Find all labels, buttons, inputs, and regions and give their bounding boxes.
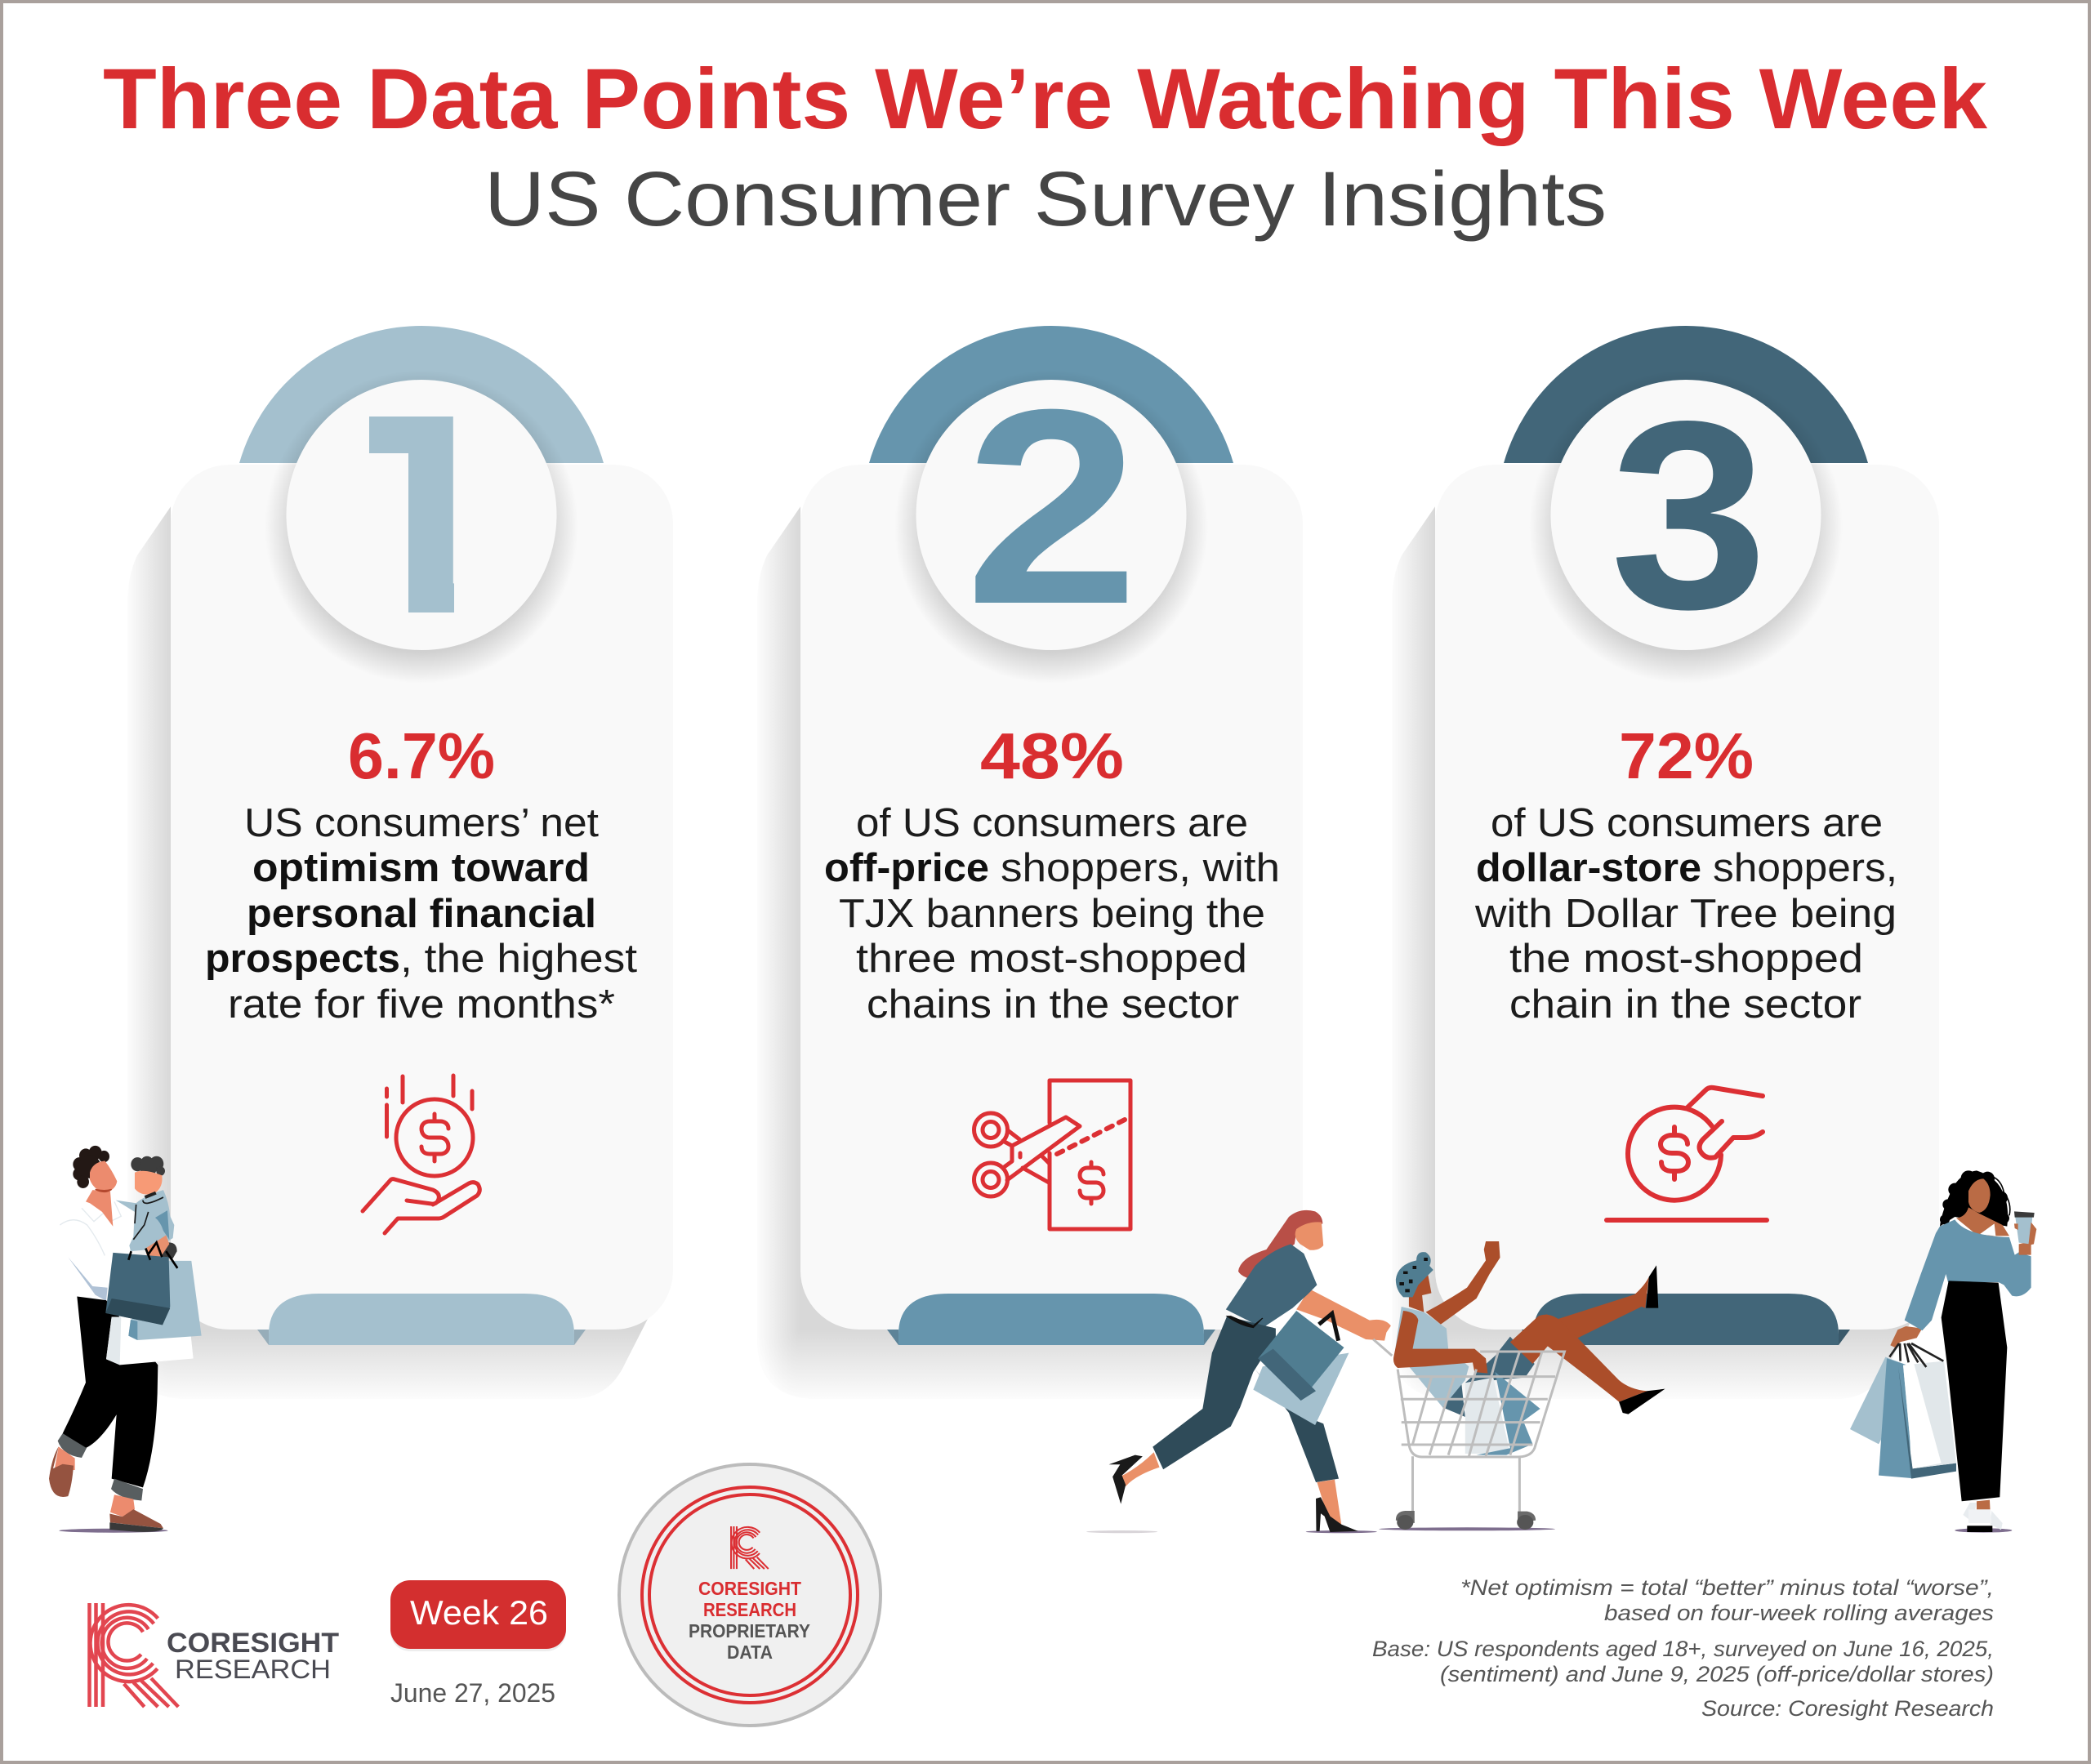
description 2 [824, 801, 1280, 1027]
footnotes [1372, 1575, 1994, 1721]
description 1: personal financial [247, 892, 596, 936]
arch 3 [1504, 326, 1868, 463]
seal text: CORESIGHT [698, 1578, 801, 1599]
panel: data point 2 [757, 326, 1303, 1401]
description 3: of US consumers are [1491, 801, 1883, 845]
card 3 [1435, 465, 1939, 1330]
bottom tab 1 [257, 1294, 586, 1345]
logo mark [90, 1603, 178, 1707]
logo wordmark [167, 1628, 339, 1684]
card shadow 2 [757, 490, 1282, 1401]
week badge: Week 26 [410, 1593, 548, 1632]
description 2: of US consumers are [856, 801, 1248, 845]
seal text: PROPRIETARY [689, 1620, 810, 1642]
description 2: shoppers, with [1001, 846, 1280, 890]
number badge 1 [271, 378, 572, 677]
icon: hand placing coin [1607, 1088, 1767, 1220]
logo: Coresight Research [90, 1603, 339, 1707]
subtitle: US Consumer Survey Insights [484, 156, 1607, 243]
seal: proprietary data [619, 1464, 881, 1726]
description 1: rate for five months* [228, 982, 615, 1027]
description 1: optimism toward [252, 846, 590, 890]
card shadow 3 [1392, 490, 1917, 1401]
footnotes: *Net optimism = total “better” minus total “worse”, [1460, 1575, 1994, 1600]
illustration: woman pushing shopping cart with seated woman [1086, 1210, 1665, 1533]
seal text: RESEARCH [703, 1599, 796, 1620]
description 3: shoppers, [1713, 846, 1897, 890]
number badge 3: 3 [1610, 365, 1768, 665]
panel: data point 1 [127, 326, 673, 1401]
footnotes: Source: Coresight Research [1701, 1696, 1994, 1721]
seal logo mark [731, 1526, 769, 1569]
description 3: chain in the sector [1509, 982, 1861, 1027]
description 3: the most-shopped [1509, 937, 1863, 981]
date: June 27, 2025 [390, 1678, 555, 1708]
number badge 3 [1529, 365, 1843, 684]
statistic 72%: 72% [1619, 719, 1754, 792]
description 1: , the highest [400, 937, 637, 981]
card 2 [800, 465, 1303, 1330]
week badge [390, 1580, 566, 1651]
card 1 [171, 465, 673, 1330]
footnotes: (sentiment) and June 9, 2025 (off-price/dollar stores) [1440, 1662, 1994, 1686]
arch 2 [869, 326, 1233, 463]
title: Three Data Points We’re Watching This Week [103, 51, 1988, 147]
description 3: with Dollar Tree being [1474, 892, 1897, 936]
icon: coin falling into hand [363, 1076, 479, 1233]
panel: data point 3 [1392, 326, 1939, 1401]
illustration: father carrying child with bags [49, 1146, 202, 1533]
description 1 [205, 801, 637, 1027]
statistic 48%: 48% [980, 719, 1124, 792]
card shadow 1 [127, 490, 653, 1401]
description 2: three most-shopped [856, 937, 1247, 981]
arch 1 [239, 326, 604, 463]
description 1: prospects [205, 937, 400, 981]
icon: scissors cutting price tag [974, 1080, 1130, 1229]
description 2: chains in the sector [867, 982, 1239, 1027]
logo wordmark: CORESIGHT [167, 1628, 339, 1659]
number badge 2: 2 [965, 352, 1139, 662]
description 3: dollar-store [1476, 846, 1701, 890]
number badge 1: 1 [324, 355, 518, 673]
illustration: woman with coffee and shopping bags [1850, 1170, 2036, 1533]
seal text: DATA [727, 1642, 773, 1663]
description 2: off-price [824, 846, 989, 890]
number badge 2 [894, 352, 1208, 684]
footnotes: based on four-week rolling averages [1604, 1601, 1994, 1625]
footnotes: Base: US respondents aged 18+, surveyed on June 16, 2025, [1372, 1637, 1994, 1661]
statistic 6.7%: 6.7% [348, 719, 495, 792]
seal text [689, 1578, 810, 1663]
bottom tab 2 [887, 1294, 1215, 1345]
bottom tab 3 [1522, 1294, 1850, 1345]
description 2: TJX banners being the [839, 892, 1265, 936]
description 1: US consumers’ net [244, 801, 599, 845]
description 3 [1474, 801, 1897, 1027]
logo wordmark: RESEARCH [175, 1655, 331, 1684]
